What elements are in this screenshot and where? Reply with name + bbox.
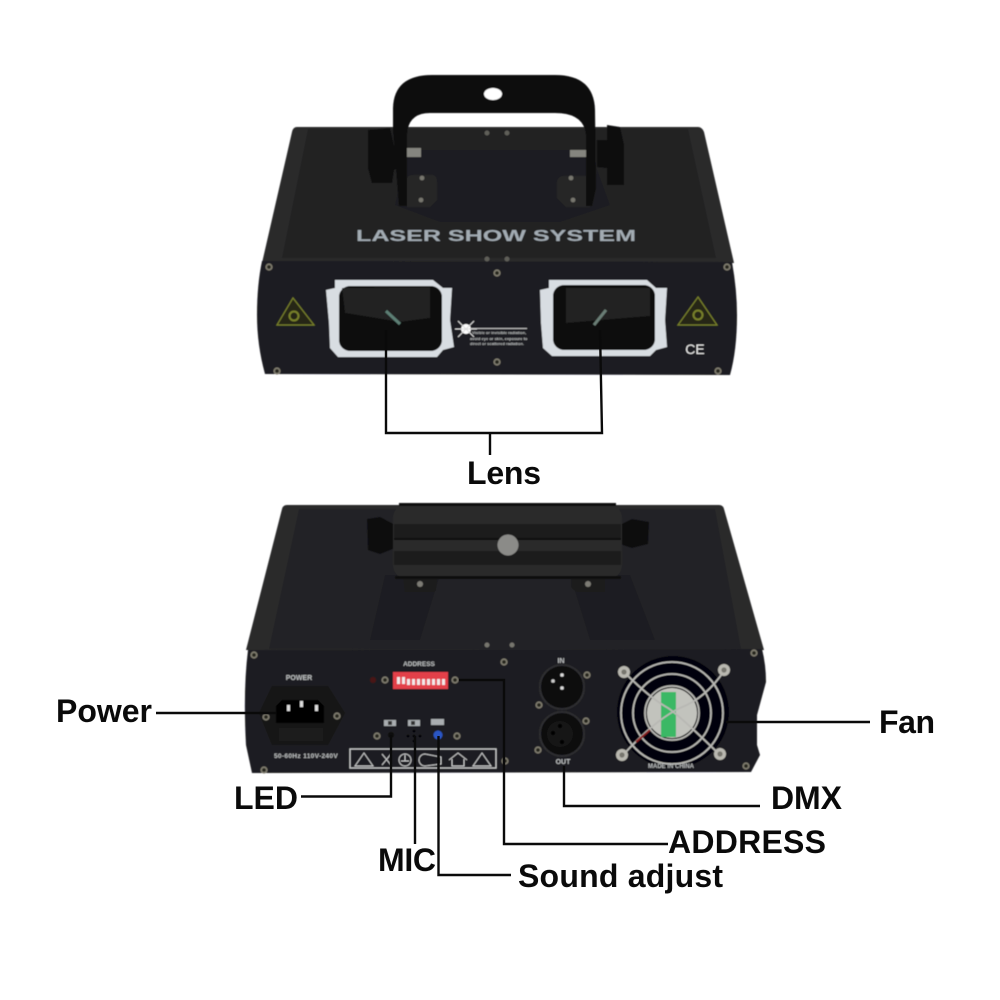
cooling fan: MADE IN CHINA — [648, 764, 695, 770]
DMX IN connector — [535, 658, 591, 709]
laser warning text: Visible or invisible radiation, — [472, 330, 526, 335]
handle feet — [403, 575, 605, 592]
laser warning text: avoid eye or skin, exposure to — [470, 336, 528, 341]
handle — [393, 503, 622, 579]
power inlet: POWER — [286, 675, 312, 682]
lens callout lines — [386, 330, 602, 455]
handle bracket — [393, 75, 596, 206]
callout: DMX — [564, 766, 843, 816]
power inlet: 50-60Hz 110V-240V — [274, 753, 338, 760]
DIP address switch: ADDRESS — [403, 661, 436, 668]
callout: ADDRESS — [459, 680, 826, 860]
LED, MIC and sound controls — [373, 719, 461, 742]
left lens — [326, 280, 454, 357]
laser warning text — [455, 321, 528, 346]
label: Lens: Lens — [467, 455, 541, 491]
callout: DMX: DMX — [771, 780, 843, 816]
callout: Power: Power — [56, 693, 152, 729]
cooling fan — [616, 656, 730, 770]
power inlet — [259, 675, 345, 760]
DMX IN connector: IN — [558, 658, 564, 665]
handle knobs — [368, 125, 624, 185]
callout: MIC: MIC — [378, 842, 436, 878]
DMX OUT connector — [534, 712, 590, 766]
front panel — [257, 261, 737, 375]
top panel — [246, 505, 764, 650]
callout: Fan: Fan — [879, 704, 935, 740]
laser unit: rear view — [245, 503, 766, 774]
callout: LED: LED — [234, 780, 298, 816]
DIP address switch — [370, 661, 459, 689]
rear panel — [245, 649, 766, 774]
handle mounting plates — [407, 175, 590, 207]
printed title: LASER SHOW SYSTEM — [356, 228, 636, 245]
callout: Sound adjust: Sound adjust — [518, 858, 723, 894]
laser warning text: direct or scattered radiation. — [470, 341, 524, 346]
callout: Sound adjust — [438, 736, 723, 894]
callout: ADDRESS: ADDRESS — [668, 824, 826, 860]
handle knobs — [367, 517, 649, 554]
icon: right laser warning — [678, 297, 717, 325]
laser unit: front view — [257, 75, 737, 375]
callout: LED — [234, 735, 391, 816]
DMX OUT connector: OUT — [556, 759, 571, 766]
safety symbols strip — [350, 749, 496, 768]
right lens — [540, 280, 667, 356]
CE mark: CE — [685, 341, 705, 357]
top panel — [262, 127, 734, 263]
icon: left laser warning — [277, 298, 314, 325]
